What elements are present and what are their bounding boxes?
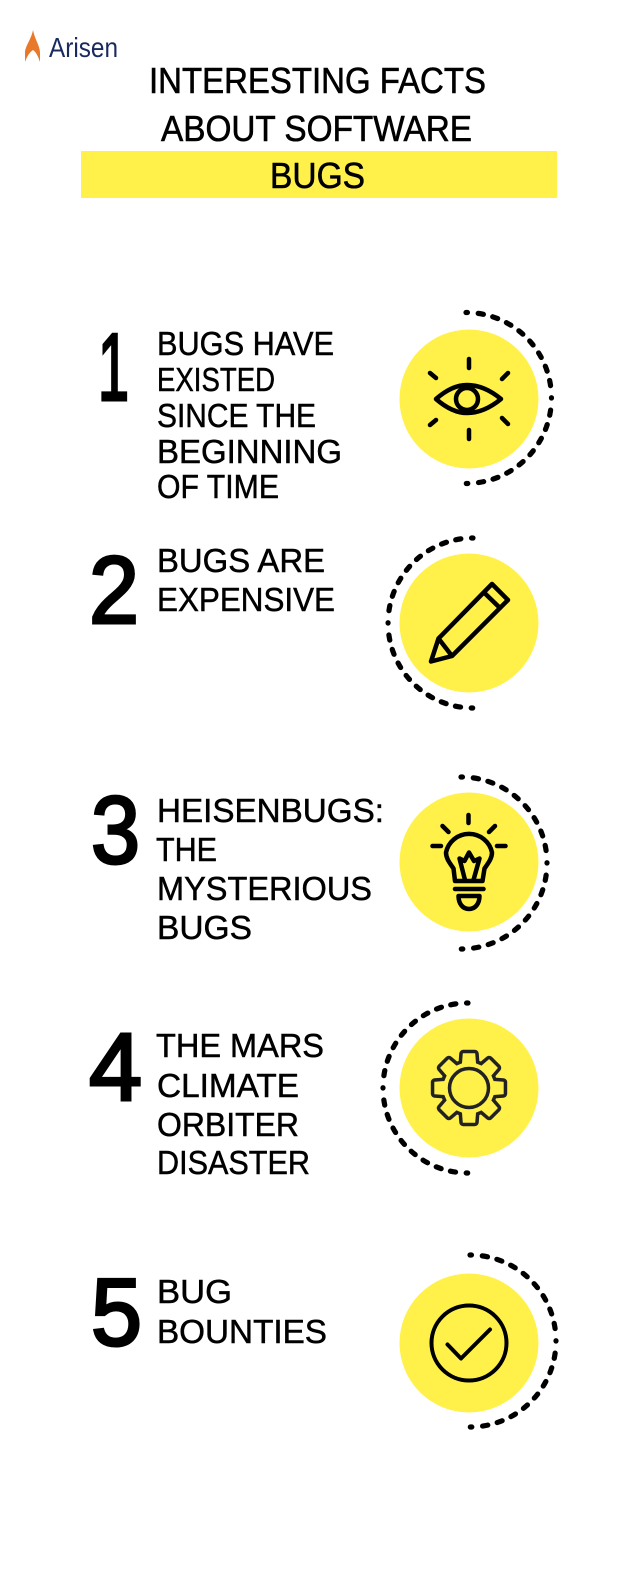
logo: Arisen: Arisen [49,32,118,63]
item 3 [91,777,547,949]
text: mars climate orbiter [156,1027,324,1181]
number 5: 5 [91,1259,142,1366]
title: ABOUT SOFTWARE [161,108,472,149]
text: mars climate orbiter: ORBITER [157,1106,299,1143]
number 4: 4 [89,1014,142,1121]
text: bugs are expensive [157,542,335,618]
text: heisenbugs [156,792,384,946]
item 1 [98,312,551,505]
text: bugs are expensive: BUGS ARE [157,542,325,579]
item 2 [89,537,538,708]
text: heisenbugs: MYSTERIOUS [157,870,372,907]
title: BUGS [270,155,365,196]
text: bug bounties: BUG [157,1273,232,1310]
text: bugs have existed: BUGS HAVE [157,325,334,362]
text: heisenbugs: THE [156,831,217,868]
text: bugs have existed: BEGINNING [157,433,342,470]
icon: eye in yellow circle [400,312,551,484]
text: mars climate orbiter: CLIMATE [157,1067,299,1104]
text: mars climate orbiter: THE MARS [156,1027,324,1064]
text: heisenbugs: BUGS [157,909,252,946]
text: bugs are expensive: EXPENSIVE [157,581,335,618]
text: mars climate orbiter: DISASTER [157,1144,310,1181]
text: bugs have existed: OF TIME [157,468,279,505]
title [81,60,557,198]
title: INTERESTING FACTS [149,60,486,101]
text: heisenbugs: HEISENBUGS: [157,792,384,829]
logo: Arisen [25,30,118,63]
text: bugs have existed: SINCE THE [157,397,316,434]
item 5 [91,1255,556,1427]
title highlight band [81,151,557,198]
number 2: 2 [89,537,139,644]
icon: gear in yellow circle [383,1003,538,1173]
icon: check mark in yellow circle [400,1255,556,1427]
number 1: 1 [98,314,129,421]
text: bug bounties [157,1273,327,1350]
icon: light bulb in yellow circle [400,777,547,949]
icon: pencil in yellow circle [388,538,538,708]
item 4 [89,1003,538,1181]
text: bugs have existed: EXISTED [157,361,275,398]
text: bugs have existed [157,325,342,505]
text: bug bounties: BOUNTIES [157,1313,327,1350]
number 3: 3 [91,777,140,884]
